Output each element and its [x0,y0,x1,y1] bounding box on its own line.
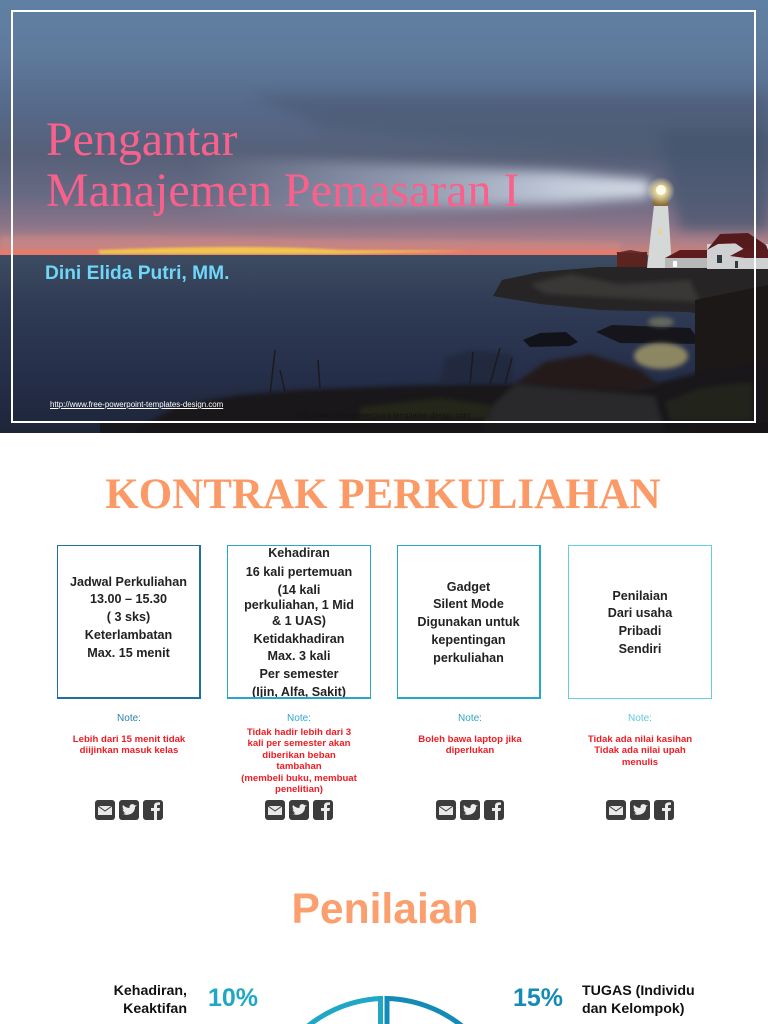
card: penilaian: Penilaian [612,589,668,603]
card: kehadiran: Kehadiran [268,546,330,560]
card: jadwal perkuliahan: ( 3 sks) [107,610,150,624]
label: tugas: dan Kelompok) [582,1000,684,1016]
donut chart, cropped [306,996,464,1024]
foreground [695,285,768,433]
card: jadwal perkuliahan: Jadwal Perkuliahan [70,575,187,589]
hero title [46,113,519,217]
social icons 3 [436,800,504,820]
card: penilaian: Dari usaha [608,606,672,620]
note text 1: diijinkan masuk kelas [80,745,178,756]
note text 1: Lebih dari 15 menit tidak [73,734,185,745]
card: gadget [397,545,541,699]
card: gadget: Digunakan untuk [417,615,520,629]
note text 4: Tidak ada nilai kasihan [588,734,692,745]
card: penilaian: Sendiri [619,642,661,656]
note text 2: penelitian) [275,784,323,795]
note text 2: Tidak hadir lebih dari 3 [247,727,351,738]
buildings [617,252,647,267]
note text 3: diperlukan [446,745,494,756]
note text 2: (membeli buku, membuat [241,773,357,784]
section title: penilaian: Penilaian [291,885,478,933]
dark duplicate url: http://www.free-powerpoint-templates-design.com [297,411,470,420]
label: tugas [582,983,695,1016]
hero title: Pengantar [46,113,238,166]
card: penilaian: Pribadi [619,624,661,638]
rocks [493,262,768,330]
label: kehadiran: Keaktifan [123,1000,187,1016]
card: jadwal perkuliahan: Max. 15 menit [87,646,170,660]
card: kehadiran: perkuliahan, 1 Mid [244,598,354,612]
card: jadwal perkuliahan [57,545,201,699]
card: gadget: Silent Mode [433,597,504,611]
note text 4: Tidak ada nilai upah [594,745,686,756]
card: jadwal perkuliahan: 13.00 – 15.30 [90,592,167,606]
social icons 1 [95,800,163,820]
hero photo: lighthouse at dusk [0,0,768,433]
note text 2: kali per semester akan [248,738,350,749]
note text 2: tambahan [276,761,322,772]
white frame on hero [11,10,756,423]
value: 15 percent: 15% [513,984,563,1012]
card: gadget: perkuliahan [433,651,504,665]
note text 3 [418,734,522,756]
card: kehadiran [227,545,371,699]
card: kehadiran: Per semester [259,667,339,681]
hero author: Dini Elida Putri, MM. [45,263,229,284]
note text 3: Boleh bawa laptop jika [418,734,522,745]
note text 4: menulis [622,757,658,768]
label: kehadiran: Kehadiran, [114,983,187,999]
value: 10 percent: 10% [208,984,258,1012]
card: kehadiran: (Ijin, Alfa, Sakit) [252,685,346,699]
label: tugas: TUGAS (Individu [582,983,695,999]
note text 2 [241,727,357,795]
note text 4 [588,734,692,768]
note label 3: Note: [458,713,482,724]
hero url link: http://www.free-powerpoint-templates-design.com [50,400,223,409]
card: kehadiran: (14 kali [278,583,320,597]
card: kehadiran: Ketidakhadiran [254,632,344,646]
card: jadwal perkuliahan: Keterlambatan [85,628,172,642]
note text 2: diberikan beban [262,750,336,761]
card: penilaian [568,545,712,699]
note label 2: Note: [287,713,311,724]
card: gadget: Gadget [447,580,490,594]
card: kehadiran: Max. 3 kali [267,649,330,663]
card: kehadiran: & 1 UAS) [272,614,326,628]
note text 1 [73,734,186,756]
card: kehadiran: 16 kali pertemuan [246,565,352,579]
social icons 2 [265,800,333,820]
note label 1: Note: [117,713,141,724]
card: gadget: kepentingan [431,633,506,647]
label: kehadiran [114,983,187,1016]
social icons 4 [606,800,674,820]
note label 4: Note: [628,713,652,724]
hero title: Manajemen Pemasaran I [46,164,519,217]
section title: kontrak perkuliahan: KONTRAK PERKULIAHAN [105,471,661,518]
